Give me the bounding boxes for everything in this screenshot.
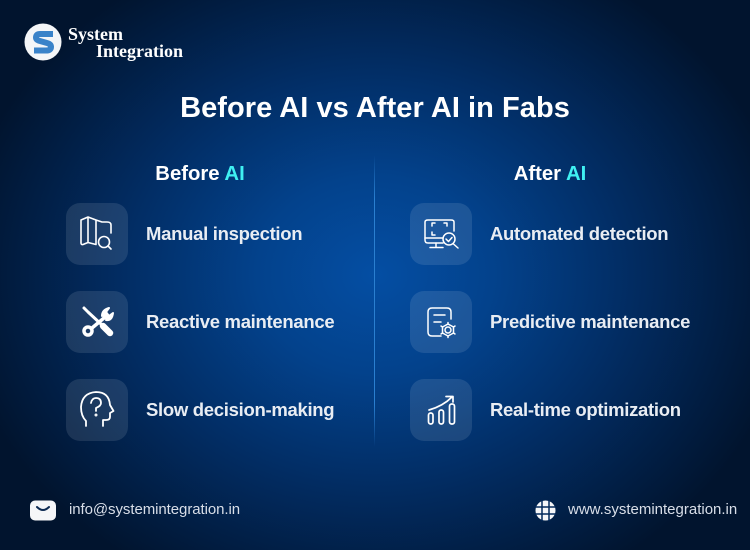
label: Predictive maintenance <box>490 311 690 332</box>
heading: after AI: After AI <box>514 163 586 185</box>
icon: globe <box>535 500 556 521</box>
footer: email <box>30 500 240 520</box>
email text: info@systemintegration.in <box>69 501 240 518</box>
icon: growth chart <box>410 379 472 441</box>
title: Before AI vs After AI in Fabs <box>180 92 570 124</box>
logo text: Integration <box>96 41 183 61</box>
panel: before AI row 1 <box>66 203 302 265</box>
website text: www.systemintegration.in <box>568 501 737 518</box>
label: Slow decision-making <box>146 399 334 420</box>
panel: after AI row 3 <box>410 379 681 441</box>
icon: tools <box>66 291 128 353</box>
panel: before AI row 3 <box>66 379 334 441</box>
logo <box>24 24 183 61</box>
icon: document gear <box>410 291 472 353</box>
logo text <box>68 24 183 61</box>
footer: website <box>535 500 737 521</box>
icon: monitor check <box>410 203 472 265</box>
panel: before AI row 2 <box>66 291 334 353</box>
logo mark <box>24 24 62 60</box>
panel: after AI row 2 <box>410 291 690 353</box>
label: Automated detection <box>490 223 668 244</box>
label: Reactive maintenance <box>146 311 334 332</box>
panel: after AI row 1 <box>410 203 668 265</box>
heading: before AI: Before AI <box>155 163 245 185</box>
icon: envelope <box>30 500 56 520</box>
logo text: System <box>68 24 123 44</box>
label: Manual inspection <box>146 223 302 244</box>
label: Real-time optimization <box>490 399 681 420</box>
center divider <box>374 155 375 447</box>
icon: head question <box>66 379 128 441</box>
icon: map search <box>66 203 128 265</box>
